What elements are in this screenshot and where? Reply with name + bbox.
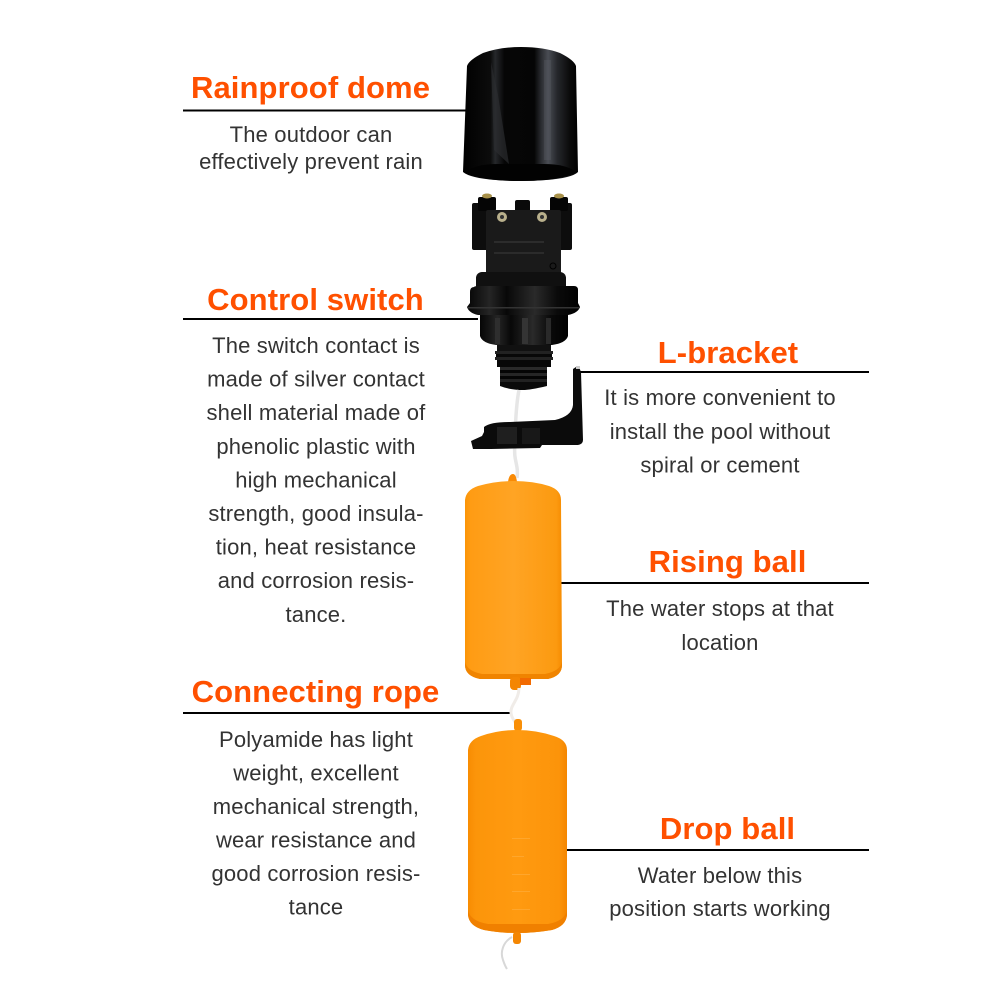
heading: Connecting rope: Connecting rope [192, 674, 439, 709]
callout: Connecting rope [183, 674, 510, 920]
text: L-bracket description: It is more convenient to [604, 385, 836, 410]
text: Control switch description: shell material made of [207, 400, 426, 425]
callout: L-bracket [578, 335, 869, 478]
heading: Drop ball: Drop ball [660, 811, 795, 846]
text: Connecting rope description: weight, excellent [232, 760, 399, 786]
text: Rising ball description: location [681, 630, 759, 655]
text: Control switch description: The switch contact is [212, 333, 420, 358]
heading: Control switch: Control switch [207, 282, 424, 317]
text: Connecting rope description: Polyamide has light [219, 727, 413, 752]
text: L-bracket description: spiral or cement [640, 453, 800, 478]
text: Rainproof dome description: effectively prevent rain [199, 149, 423, 174]
icon: control switch body [467, 194, 580, 390]
text: Control switch description: tance. [286, 602, 346, 627]
text: Connecting rope description: good corrosion resis- [212, 861, 420, 886]
heading: Rainproof dome: Rainproof dome [191, 70, 430, 105]
icon: black rainproof dome cap [463, 47, 578, 181]
icon: L-bracket [471, 366, 583, 449]
text: Control switch description: made of silver contact [207, 367, 425, 392]
callout: Rising ball [560, 544, 869, 655]
text: Connecting rope description: mechanical strength, [213, 794, 419, 819]
text: Rising ball description: The water stops at that [606, 596, 834, 621]
icon: connecting rope end [502, 937, 512, 969]
text: Drop ball description: position starts working [609, 896, 831, 921]
icon: connecting rope upper [515, 390, 519, 478]
text: Connecting rope description: wear resistance and [215, 828, 416, 852]
heading: Rising ball: Rising ball [649, 544, 806, 579]
text: Control switch description: phenolic plastic with [216, 434, 416, 459]
callout: Rainproof dome [183, 70, 466, 174]
callout: Control switch [183, 282, 478, 627]
icon: drop ball orange float [468, 719, 567, 944]
switch terminal blocks [472, 194, 572, 278]
text: L-bracket description: install the pool without [610, 419, 830, 444]
callout: Drop ball [565, 811, 869, 921]
heading: L-bracket: L-bracket [658, 335, 798, 370]
text: Rainproof dome description: The outdoor can [230, 122, 392, 147]
icon: rising ball orange float [465, 474, 562, 690]
text: Drop ball description: Water below this [638, 863, 802, 888]
icon: connecting rope middle [511, 688, 519, 726]
text: Control switch description: and corrosion resis- [218, 568, 414, 593]
switch neck and collar [467, 272, 580, 345]
text: Control switch description: tion, heat resistance [216, 535, 416, 560]
text: Connecting rope description: tance [289, 894, 343, 920]
switch threaded stem [495, 345, 553, 390]
text: Control switch description: high mechanical [235, 467, 397, 492]
text: Control switch description: strength, good insula- [208, 501, 424, 526]
